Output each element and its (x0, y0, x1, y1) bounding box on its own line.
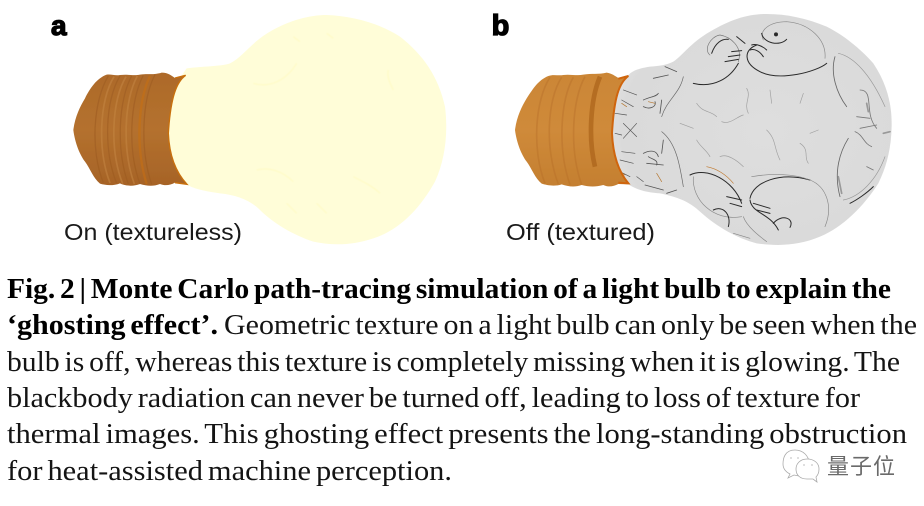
watermark (783, 450, 895, 482)
caption text (7, 274, 917, 487)
panel label b: b (492, 10, 509, 42)
engraved swirl texture (615, 22, 890, 242)
panel a: bulb on (51, 10, 446, 244)
icon: chat bubbles (783, 450, 819, 482)
panel b: bulb off (492, 10, 892, 245)
caption body line two: bulb is off, whereas this texture is completely missing when it is glowing. The (7, 346, 900, 378)
faint glass shading (253, 33, 393, 213)
icon: lamp screw base (73, 73, 187, 186)
icon: textured bulb glass (611, 14, 892, 245)
screw thread ribs (95, 75, 155, 184)
screw thread ribs (537, 77, 585, 185)
panel label a: a (51, 10, 67, 41)
icon: glowing bulb glass (168, 15, 446, 244)
caption bold title line two: ‘ghosting effect’. (7, 310, 218, 341)
caption body line four: thermal images. This ghosting effect presents the long-standing obstruction (7, 418, 908, 450)
label: on textureless: On (textureless) (64, 219, 242, 245)
watermark brand name: 量子位 (827, 454, 895, 479)
caption body line one: Geometric texture on a light bulb can only be seen when the (224, 309, 917, 341)
icon: lamp screw base (515, 73, 629, 187)
caption bold title line one: Fig. 2 | Monte Carlo path-tracing simulation of a light bulb to explain the (7, 274, 891, 305)
label: off textured: Off (textured) (506, 219, 655, 245)
caption body line five: for heat-assisted machine perception. (7, 455, 452, 487)
caption body line three: blackbody radiation can never be turned off, leading to loss of texture for (7, 382, 860, 414)
